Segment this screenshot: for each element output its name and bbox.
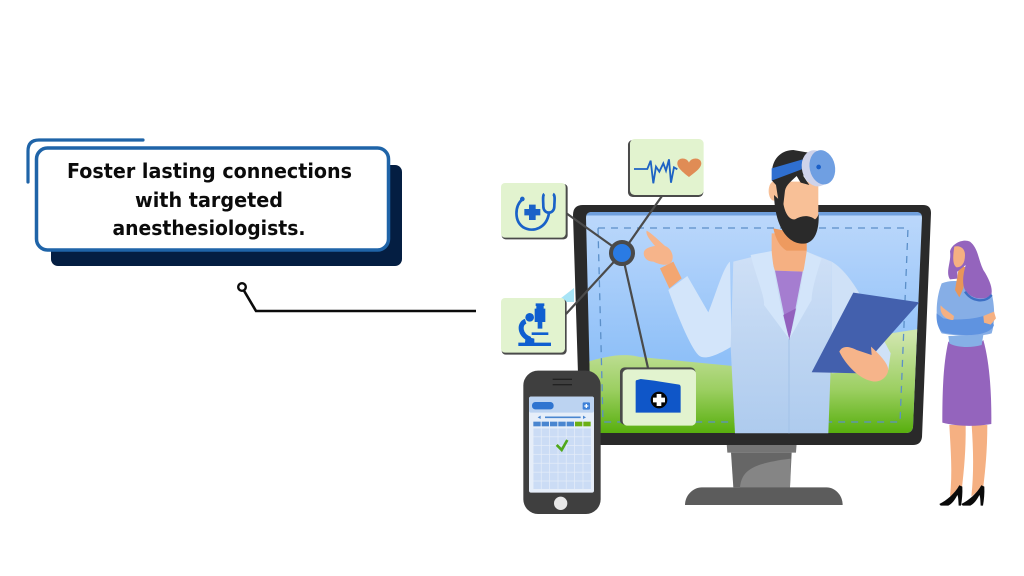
phone screen (529, 397, 594, 493)
calendar weekday row (533, 422, 591, 426)
monitor bezel (573, 205, 931, 445)
shirt (775, 271, 803, 340)
callout text (67, 159, 352, 240)
callout text: with targeted (135, 188, 283, 212)
infographic canvas (26, 138, 996, 514)
left sleeve (668, 262, 732, 357)
pointing hand (644, 231, 673, 265)
waist (948, 335, 983, 347)
monitor screen (580, 212, 925, 440)
icon card: medical folder (620, 367, 696, 426)
icon card: stethoscope (501, 183, 568, 239)
right lapel (789, 252, 822, 339)
neck shadow (773, 228, 807, 251)
monitor (573, 205, 931, 445)
face (953, 246, 965, 267)
crossed arms (937, 313, 994, 335)
high heels (939, 485, 984, 506)
phone home button (554, 497, 567, 510)
beard (774, 195, 819, 244)
woman (937, 241, 996, 506)
raised forearm (660, 262, 682, 288)
coat seam (787, 339, 790, 433)
phone app header (529, 397, 594, 413)
legs (949, 425, 987, 497)
connector line (238, 283, 476, 311)
smartphone (523, 371, 601, 514)
neck (955, 265, 966, 297)
network lines and hub (566, 196, 662, 368)
doctor (644, 147, 919, 433)
calendar grid (533, 428, 591, 489)
holding hand (839, 347, 888, 382)
right sleeve (832, 262, 891, 373)
callout text: anesthesiologists. (112, 216, 306, 240)
calendar month selector (545, 415, 581, 420)
head mirror (798, 147, 838, 190)
phone speaker (553, 379, 572, 385)
icon card: microscope (501, 298, 567, 355)
hair edge (965, 292, 992, 300)
torso (937, 281, 994, 336)
hands (940, 305, 996, 325)
hair (772, 150, 809, 205)
phone body (523, 371, 601, 514)
monitor stand (685, 443, 843, 505)
check mark (557, 440, 567, 450)
callout text: Foster lasting connections (67, 159, 352, 183)
callout text panel (36, 148, 388, 250)
ear (769, 181, 779, 201)
left lapel (751, 251, 789, 339)
coat body (731, 252, 832, 433)
hair (948, 241, 992, 299)
callout accent bracket (28, 140, 143, 182)
face (782, 182, 818, 223)
hub node (611, 242, 633, 264)
icon card: heart rate (628, 139, 704, 197)
skirt (942, 340, 991, 426)
headband (772, 159, 803, 181)
dashed frame (598, 228, 908, 422)
light beam (556, 288, 574, 302)
neck (771, 233, 807, 272)
callout: message box (28, 140, 402, 266)
shirt fold (783, 308, 796, 340)
head (769, 147, 838, 244)
clipboard (812, 293, 919, 373)
callout shadow panel (51, 165, 402, 266)
